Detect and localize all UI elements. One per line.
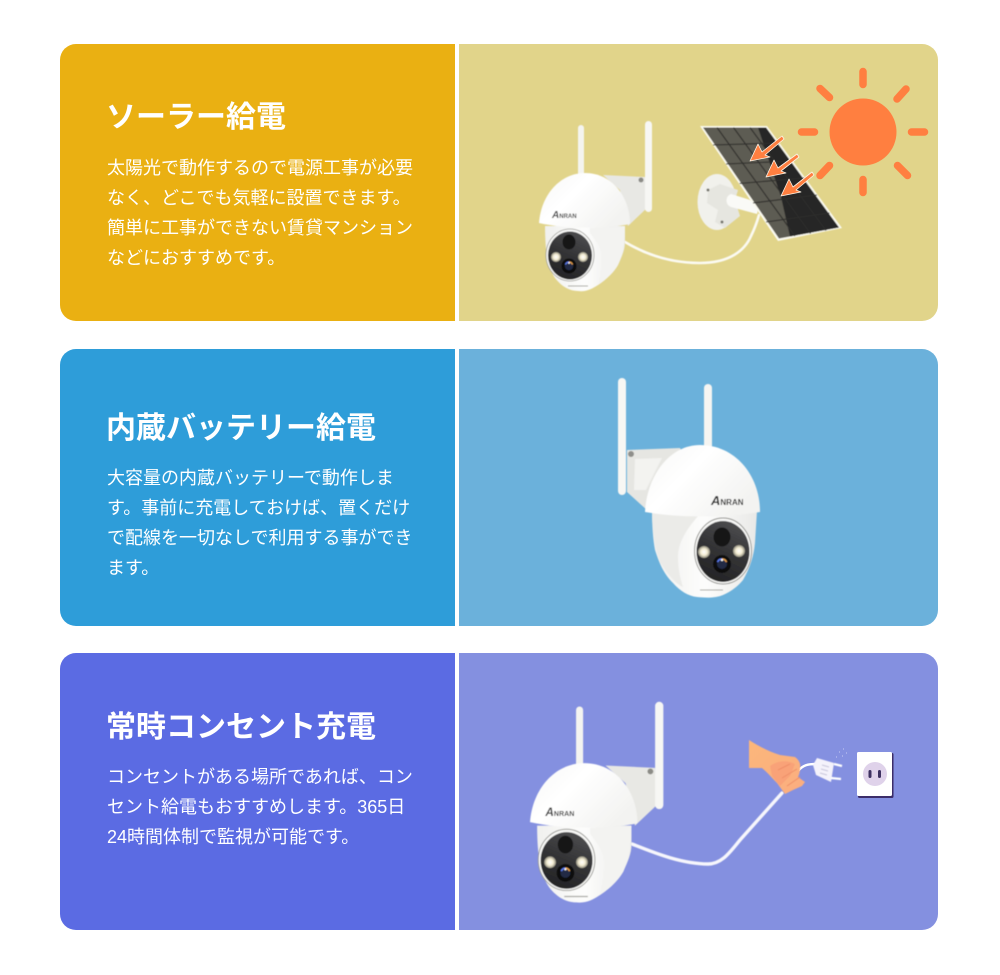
icon: security camera: ANRAN [551,210,577,221]
text block: battery description: ます。 [107,558,159,578]
cable: hand to plug [798,764,816,771]
text block: outlet description [107,767,413,847]
text block: outlet description: 24時間体制で監視が可能です。 [107,827,359,847]
text block: solar power description [107,158,413,268]
cable: camera to plug [632,793,782,864]
panel: built-in battery [60,349,938,626]
icon: solar panel mount [698,174,760,230]
heading: solar power: ソーラー給電 [106,101,286,134]
icon: security camera [530,702,663,903]
arrows: sunlight hitting the panel [750,136,814,196]
text block: outlet description: セント給電もおすすめします。365日 [107,797,405,817]
text block: battery description: で配線を一切なしで利用する事ができ [107,528,412,548]
sparks: near plug [836,749,847,757]
text block: solar power description: 簡単に工事ができない賃貸マンション [107,218,413,238]
text block: battery description: す。事前に充電しておけば、置くだけ [107,498,410,518]
icon: security camera front view [618,378,760,598]
icon: security camera front view: ANRAN [710,493,744,508]
text block: battery description: 大容量の内蔵バッテリーで動作しま [107,468,394,488]
icon: hand holding plug [749,740,805,794]
heading: outlet charging: 常時コンセント充電 [106,711,376,744]
text block: outlet description: コンセントがある場所であれば、コン [107,767,413,787]
icon: sun [802,72,924,192]
text block: battery description [107,468,412,578]
text block: solar power description: なく、どこでも気軽に設置できます。 [107,188,411,208]
panel: outlet illustration [459,653,938,930]
text block: solar power description: 太陽光で動作するので電源工事が必要 [107,158,413,178]
panel: outlet text [60,653,455,930]
cable: camera to solar panel [625,215,759,263]
icon: plug [813,758,842,782]
panel: battery text [60,349,455,626]
panel: solar power text [60,44,455,321]
icon: wall outlet [857,752,894,798]
text block: solar power description: などにおすすめです。 [107,248,285,268]
icon: security camera: ANRAN [544,805,574,819]
panel: solar power [60,44,938,321]
panel: solar power illustration [459,44,938,321]
heading: built-in battery: 内蔵バッテリー給電 [106,412,376,445]
panel: outlet charging [60,653,938,930]
icon: security camera [539,121,652,291]
icon: solar panel [700,126,842,241]
panel: battery illustration [459,349,938,626]
